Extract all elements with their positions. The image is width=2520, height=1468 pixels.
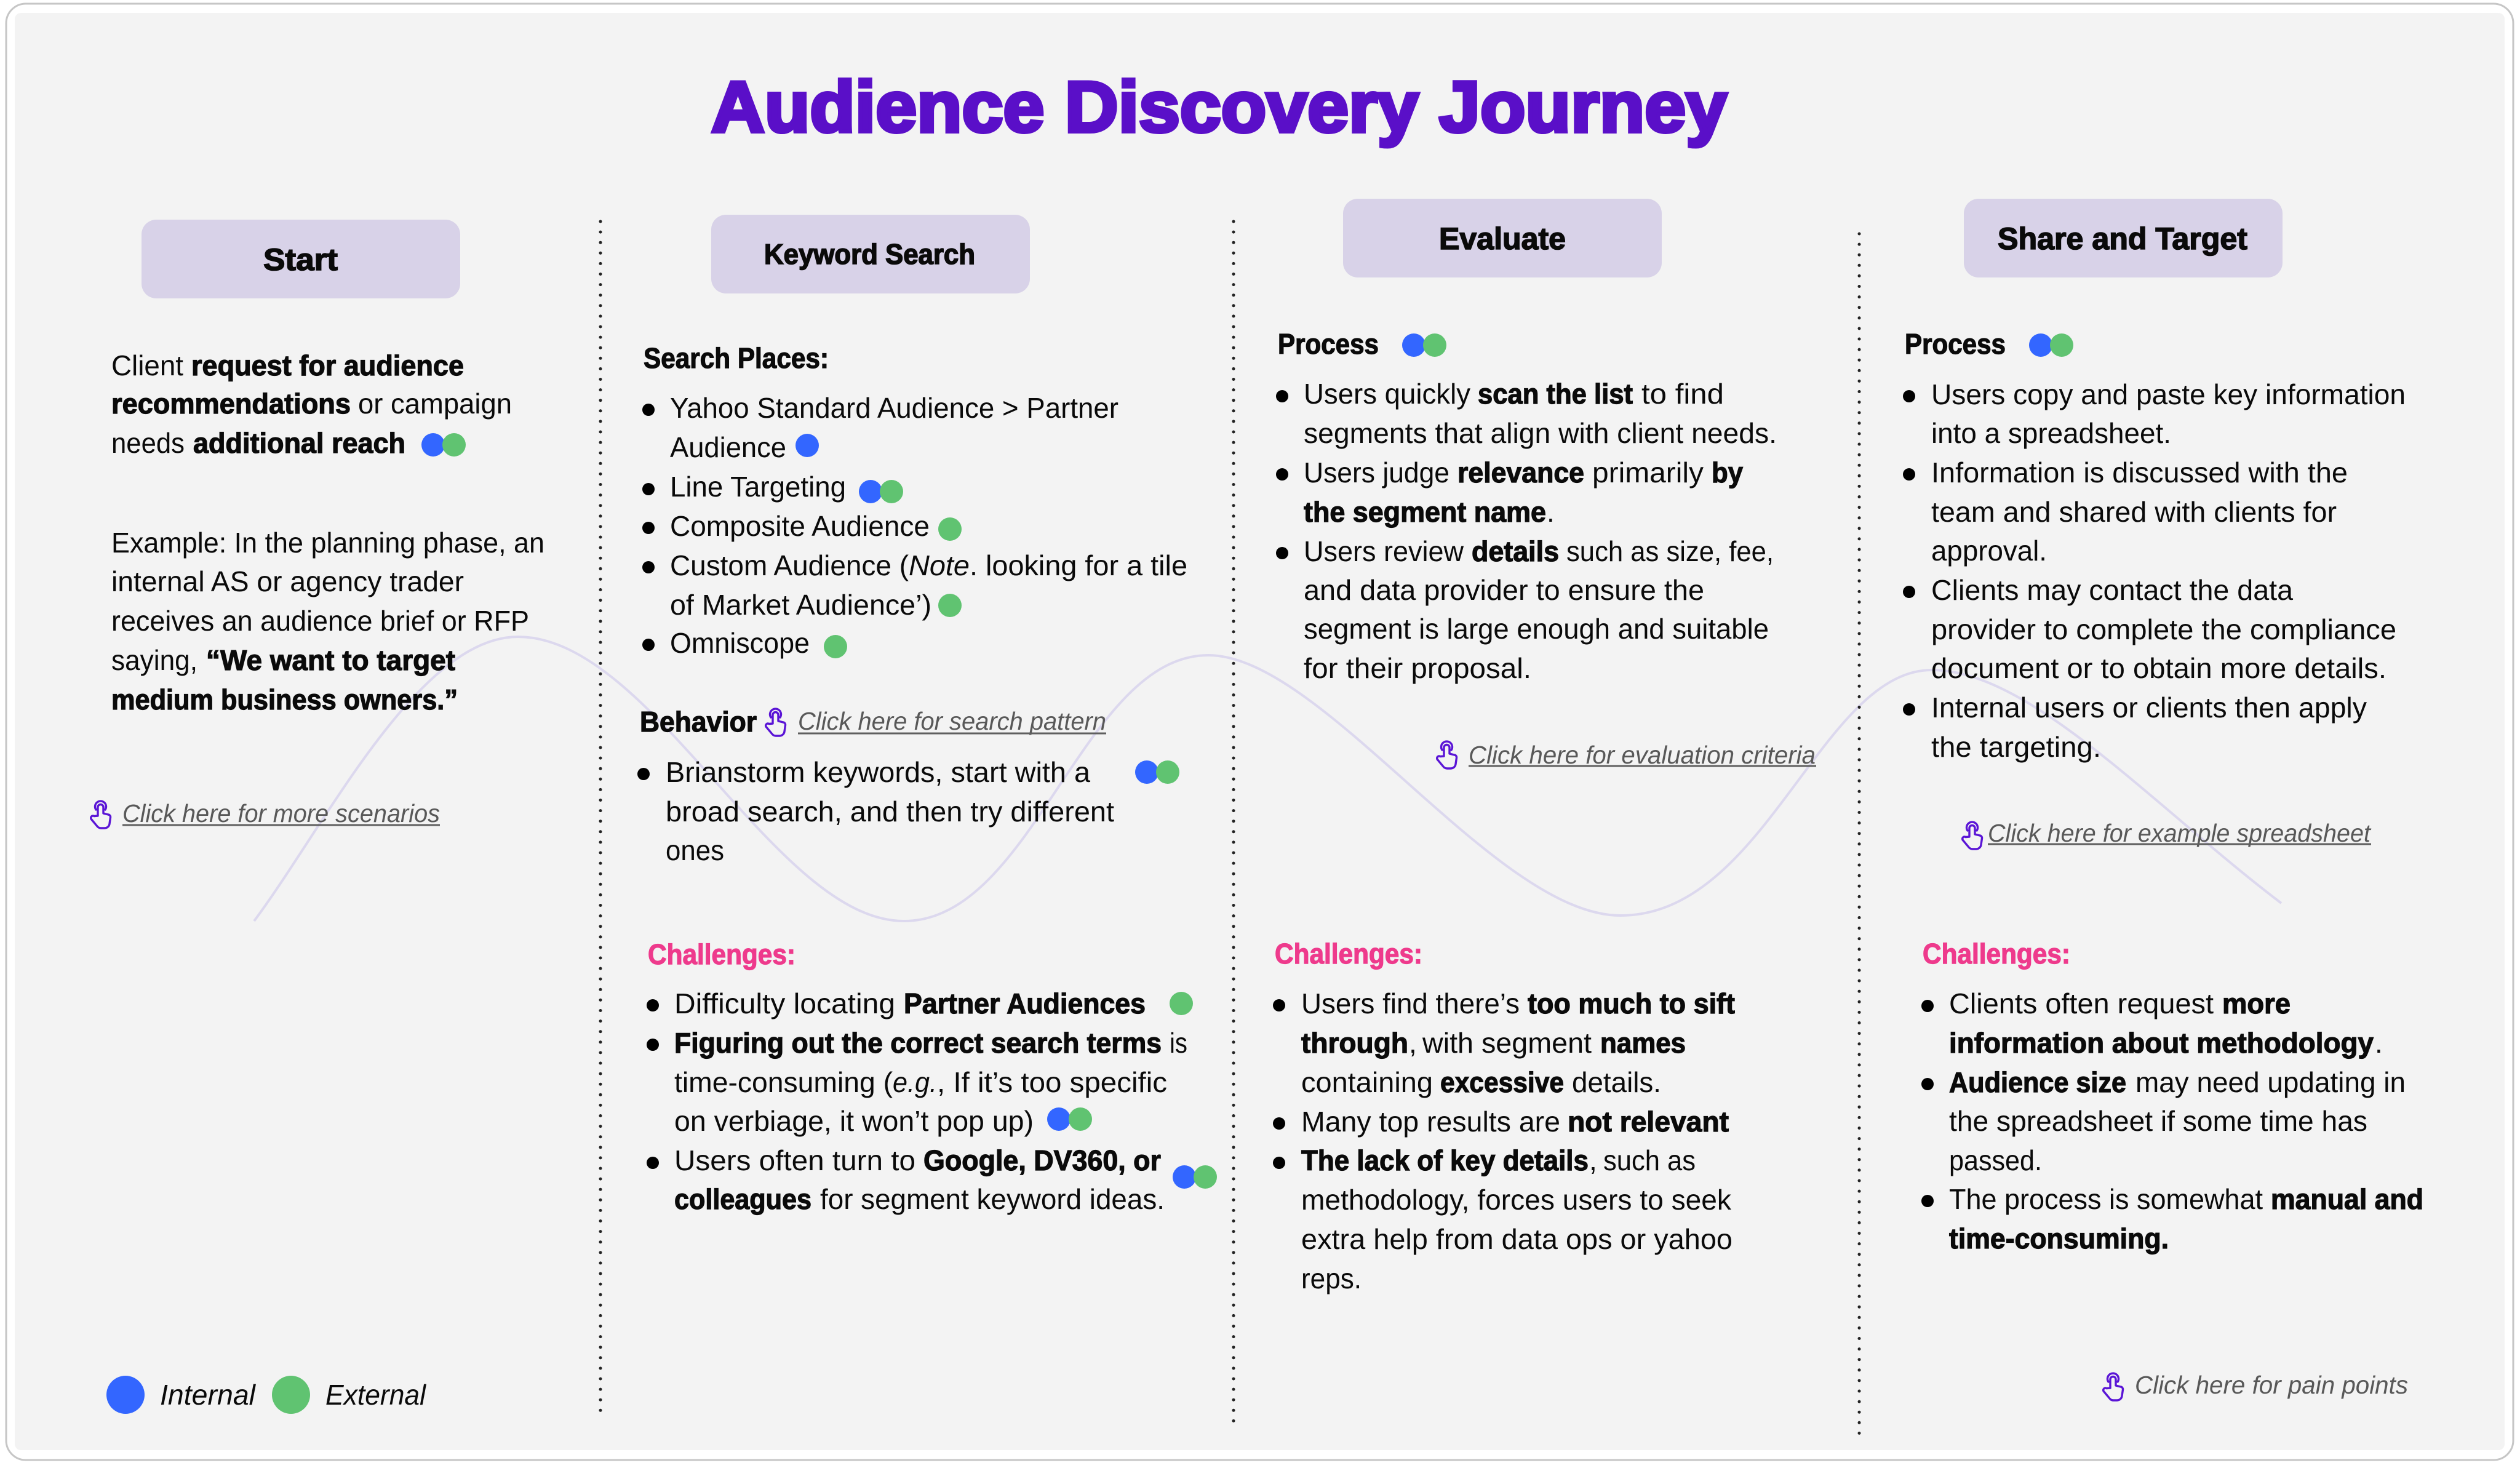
process: share and target: Users copy and paste key information <box>1931 378 2406 410</box>
challenges: share and target: information about methodology <box>1949 1027 2374 1059</box>
challenges: keyword search: Users often turn to <box>674 1144 915 1176</box>
heading: evaluate <box>1343 199 1662 277</box>
text block: example: “We want to target <box>206 644 455 676</box>
journey wave line <box>254 637 2281 921</box>
search places list: Note <box>909 549 970 581</box>
link: evaluation criteria: Click here for evaluation criteria <box>1469 741 1816 769</box>
challenges: evaluate: with segment <box>1422 1027 1592 1059</box>
challenges: keyword search: e.g. <box>893 1066 937 1098</box>
challenges: share and target: The process is somewhat <box>1949 1183 2263 1215</box>
challenges: share and target: Audience size <box>1949 1066 2126 1098</box>
challenges: evaluate: not relevant <box>1568 1106 1729 1138</box>
challenges: keyword search: time-consuming ( <box>674 1066 893 1098</box>
process: share and target: Internal users or clients then apply <box>1931 692 2367 724</box>
search places list: Composite Audience <box>670 510 930 542</box>
challenges: evaluate: Users find there’s <box>1301 987 1520 1019</box>
challenges: share and target: the spreadsheet if some time has <box>1949 1105 2367 1137</box>
search places list: . looking for a tile <box>970 549 1187 581</box>
challenges: evaluate: Many top results are <box>1301 1106 1560 1138</box>
text block: client request: needs <box>111 427 185 459</box>
legend: Internal <box>160 1379 257 1411</box>
process: share and target: team and shared with clients for <box>1931 496 2337 528</box>
legend: External <box>325 1379 427 1411</box>
challenges: share and target: Challenges: <box>1923 938 2070 970</box>
challenges: evaluate: excessive <box>1440 1066 1564 1098</box>
challenges: evaluate: through <box>1301 1027 1408 1059</box>
text block: example: medium business owners.” <box>111 684 458 716</box>
challenges: keyword search: is <box>1170 1027 1187 1059</box>
challenges: evaluate: , <box>1589 1144 1597 1176</box>
behavior: Brianstorm keywords, start with a <box>666 756 1090 788</box>
text block: client request: Client <box>111 349 183 381</box>
heading: evaluate: Evaluate <box>1439 221 1566 256</box>
title: Audience Discovery Journey <box>711 66 1727 147</box>
challenges: keyword search: Figuring out the correct search terms <box>674 1027 1162 1059</box>
link: example spreadsheet: Click here for example spreadsheet <box>1988 819 2372 847</box>
link: more scenarios: Click here for more scenarios <box>122 799 440 828</box>
process: share and target: Clients may contact the data <box>1931 574 2293 606</box>
behavior: Click here for search pattern <box>798 707 1106 735</box>
challenges: evaluate: , <box>1409 1027 1417 1059</box>
process: evaluate: Users quickly <box>1304 378 1470 410</box>
heading: share and target <box>1964 199 2283 277</box>
challenges: share and target <box>1921 938 2423 1255</box>
challenges: evaluate: names <box>1600 1027 1686 1059</box>
process: evaluate: to find <box>1641 378 1724 410</box>
text block: client request: recommendations <box>111 388 351 420</box>
text block: client request: request for audience <box>191 349 464 381</box>
search places list: Search Places: <box>644 342 829 374</box>
process: share and target: into a spreadsheet. <box>1931 417 2171 449</box>
challenges: keyword search: Challenges: <box>648 938 795 970</box>
process: evaluate: details <box>1472 535 1559 567</box>
heading: keyword search: Keyword Search <box>764 238 975 270</box>
process: evaluate: segment is large enough and suitable <box>1304 613 1769 645</box>
process: evaluate: primarily <box>1592 457 1704 489</box>
process: evaluate <box>1276 328 1777 684</box>
process: share and target: approval. <box>1931 535 2047 567</box>
challenges: evaluate: too much to sift <box>1528 987 1735 1019</box>
challenges: evaluate: details. <box>1572 1066 1661 1098</box>
challenges: share and target: manual and <box>2271 1183 2423 1215</box>
challenges: share and target: more <box>2222 987 2291 1019</box>
process: evaluate: relevance <box>1457 457 1584 489</box>
process: share and target: the targeting. <box>1931 731 2101 763</box>
panel: evaluate <box>1273 199 1816 1294</box>
process: share and target: provider to complete the compliance <box>1931 613 2396 645</box>
process: share and target: document or to obtain more details. <box>1931 652 2386 684</box>
search places list: Custom Audience ( <box>670 549 909 581</box>
heading: start <box>142 220 460 298</box>
behavior: Behavior <box>640 706 757 738</box>
challenges: keyword search: for segment keyword ideas. <box>820 1183 1165 1215</box>
text block: example <box>111 527 544 716</box>
process: evaluate: Process <box>1278 328 1379 360</box>
search places list: Yahoo Standard Audience > Partner <box>670 392 1118 424</box>
challenges: keyword search: on verbiage, it won’t pop up) <box>674 1105 1034 1137</box>
challenges: share and target: . <box>2375 1027 2383 1059</box>
legend <box>106 1376 427 1414</box>
challenges: keyword search: , If it’s too specific <box>937 1066 1167 1098</box>
search places list <box>642 342 1187 659</box>
process: share and target: Process <box>1905 328 2006 360</box>
challenges: share and target: Clients often request <box>1949 987 2214 1019</box>
process: evaluate: segments that align with client needs. <box>1304 417 1777 449</box>
text block: client request: additional reach <box>193 427 405 459</box>
process: evaluate: such as size, fee, <box>1566 535 1774 567</box>
behavior: ones <box>666 834 724 866</box>
text block: example: saying, <box>111 644 197 676</box>
process: evaluate: the segment name <box>1304 496 1546 528</box>
process: evaluate: Users judge <box>1304 457 1449 489</box>
heading: start: Start <box>263 242 338 277</box>
process: evaluate: . <box>1547 496 1555 528</box>
process: evaluate: for their proposal. <box>1304 652 1531 684</box>
challenges: evaluate <box>1273 938 1735 1294</box>
behavior <box>637 706 1179 866</box>
search places list: of Market Audience’) <box>670 589 931 621</box>
process: evaluate: by <box>1712 457 1743 489</box>
challenges: keyword search: colleagues <box>674 1183 811 1215</box>
challenges: share and target: time-consuming. <box>1949 1223 2169 1255</box>
link: pain points: Click here for pain points <box>2135 1371 2408 1399</box>
text block: client request <box>111 349 512 459</box>
text block: example: Example: In the planning phase, an <box>111 527 544 559</box>
challenges: keyword search: Google, DV360, or <box>923 1144 1161 1176</box>
process: evaluate: and data provider to ensure the <box>1304 574 1704 606</box>
process: share and target <box>1903 328 2406 763</box>
process: evaluate: Users review <box>1304 535 1464 567</box>
challenges: evaluate: reps. <box>1301 1263 1362 1294</box>
challenges: keyword search: Partner Audiences <box>904 987 1146 1019</box>
challenges: evaluate: Challenges: <box>1275 938 1422 970</box>
heading: share and target: Share and Target <box>1998 221 2247 256</box>
challenges: evaluate: methodology, forces users to seek <box>1301 1184 1732 1216</box>
challenges: evaluate: such as <box>1603 1144 1696 1176</box>
challenges: share and target: may need updating in <box>2135 1066 2406 1098</box>
search places list: Line Targeting <box>670 471 846 503</box>
challenges: keyword search <box>647 938 1217 1215</box>
challenges: share and target: passed. <box>1949 1144 2042 1176</box>
text block: client request: or campaign <box>358 388 512 420</box>
panel: share and target <box>1903 199 2423 1400</box>
search places list: Omniscope <box>670 627 810 659</box>
text block: example: receives an audience brief or RFP <box>111 605 529 637</box>
panel: keyword search <box>637 215 1217 1215</box>
search places list: Audience <box>670 431 786 463</box>
text block: example: internal AS or agency trader <box>111 565 464 597</box>
heading: keyword search <box>711 215 1030 293</box>
process: evaluate: scan the list <box>1478 378 1633 410</box>
panel: start <box>91 220 544 1414</box>
challenges: keyword search: Difficulty locating <box>674 987 895 1019</box>
challenges: evaluate: The lack of key details <box>1301 1144 1589 1176</box>
process: share and target: Information is discussed with the <box>1931 457 2348 489</box>
behavior: broad search, and then try different <box>666 796 1114 828</box>
challenges: evaluate: extra help from data ops or yahoo <box>1301 1223 1732 1255</box>
challenges: evaluate: containing <box>1301 1066 1433 1098</box>
